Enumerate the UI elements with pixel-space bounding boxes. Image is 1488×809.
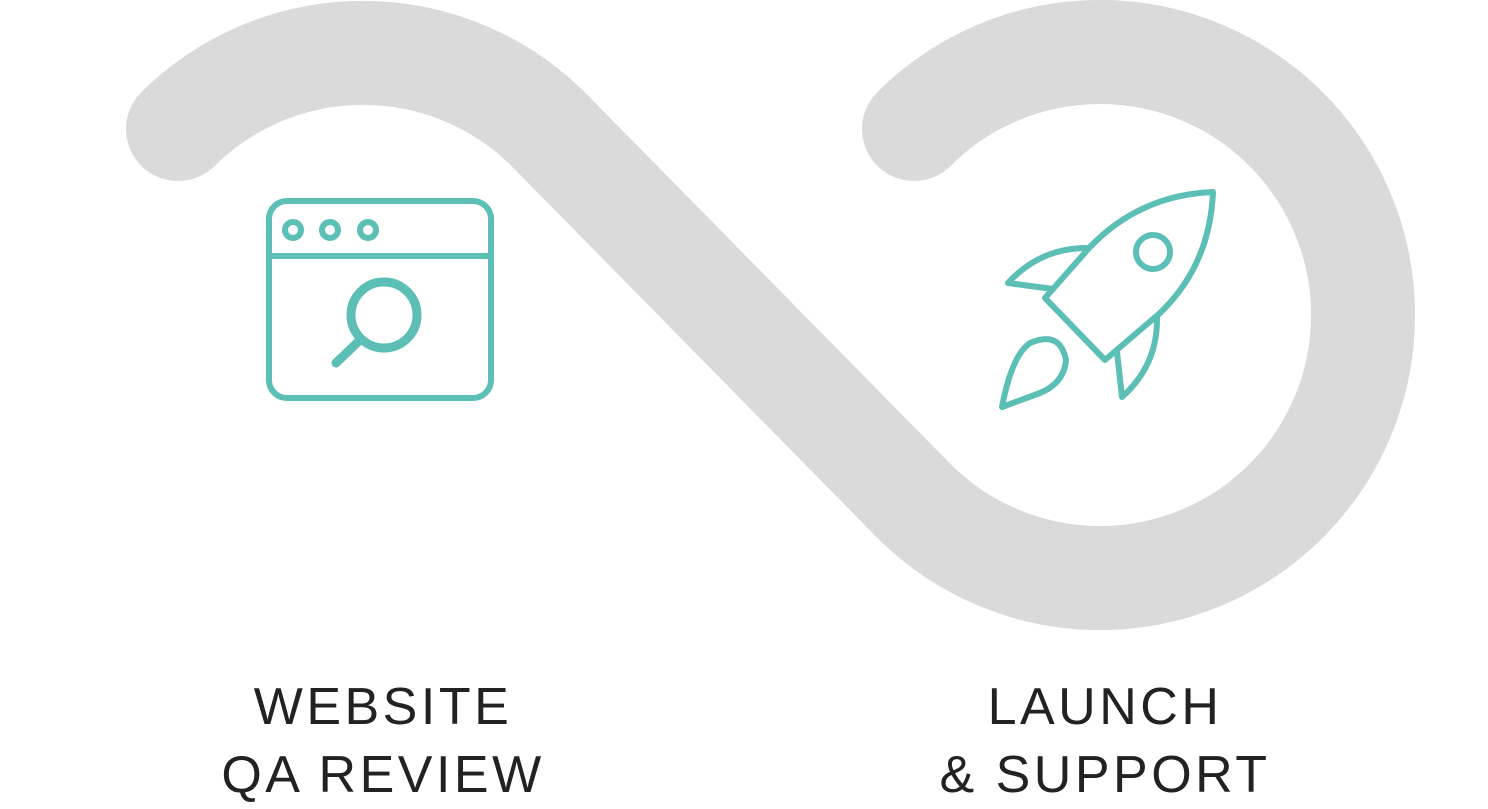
loop path — [178, 52, 1363, 578]
label: website QA review: WEBSITE — [254, 678, 512, 736]
label: website QA review — [221, 678, 545, 804]
label: launch & support: LAUNCH — [988, 678, 1222, 736]
icon: rocket — [1002, 192, 1213, 407]
icon: browser with magnifier — [269, 201, 491, 398]
label: launch & support: & SUPPORT — [939, 746, 1271, 804]
label: website QA review: QA REVIEW — [221, 746, 545, 804]
label: launch & support — [939, 678, 1271, 804]
